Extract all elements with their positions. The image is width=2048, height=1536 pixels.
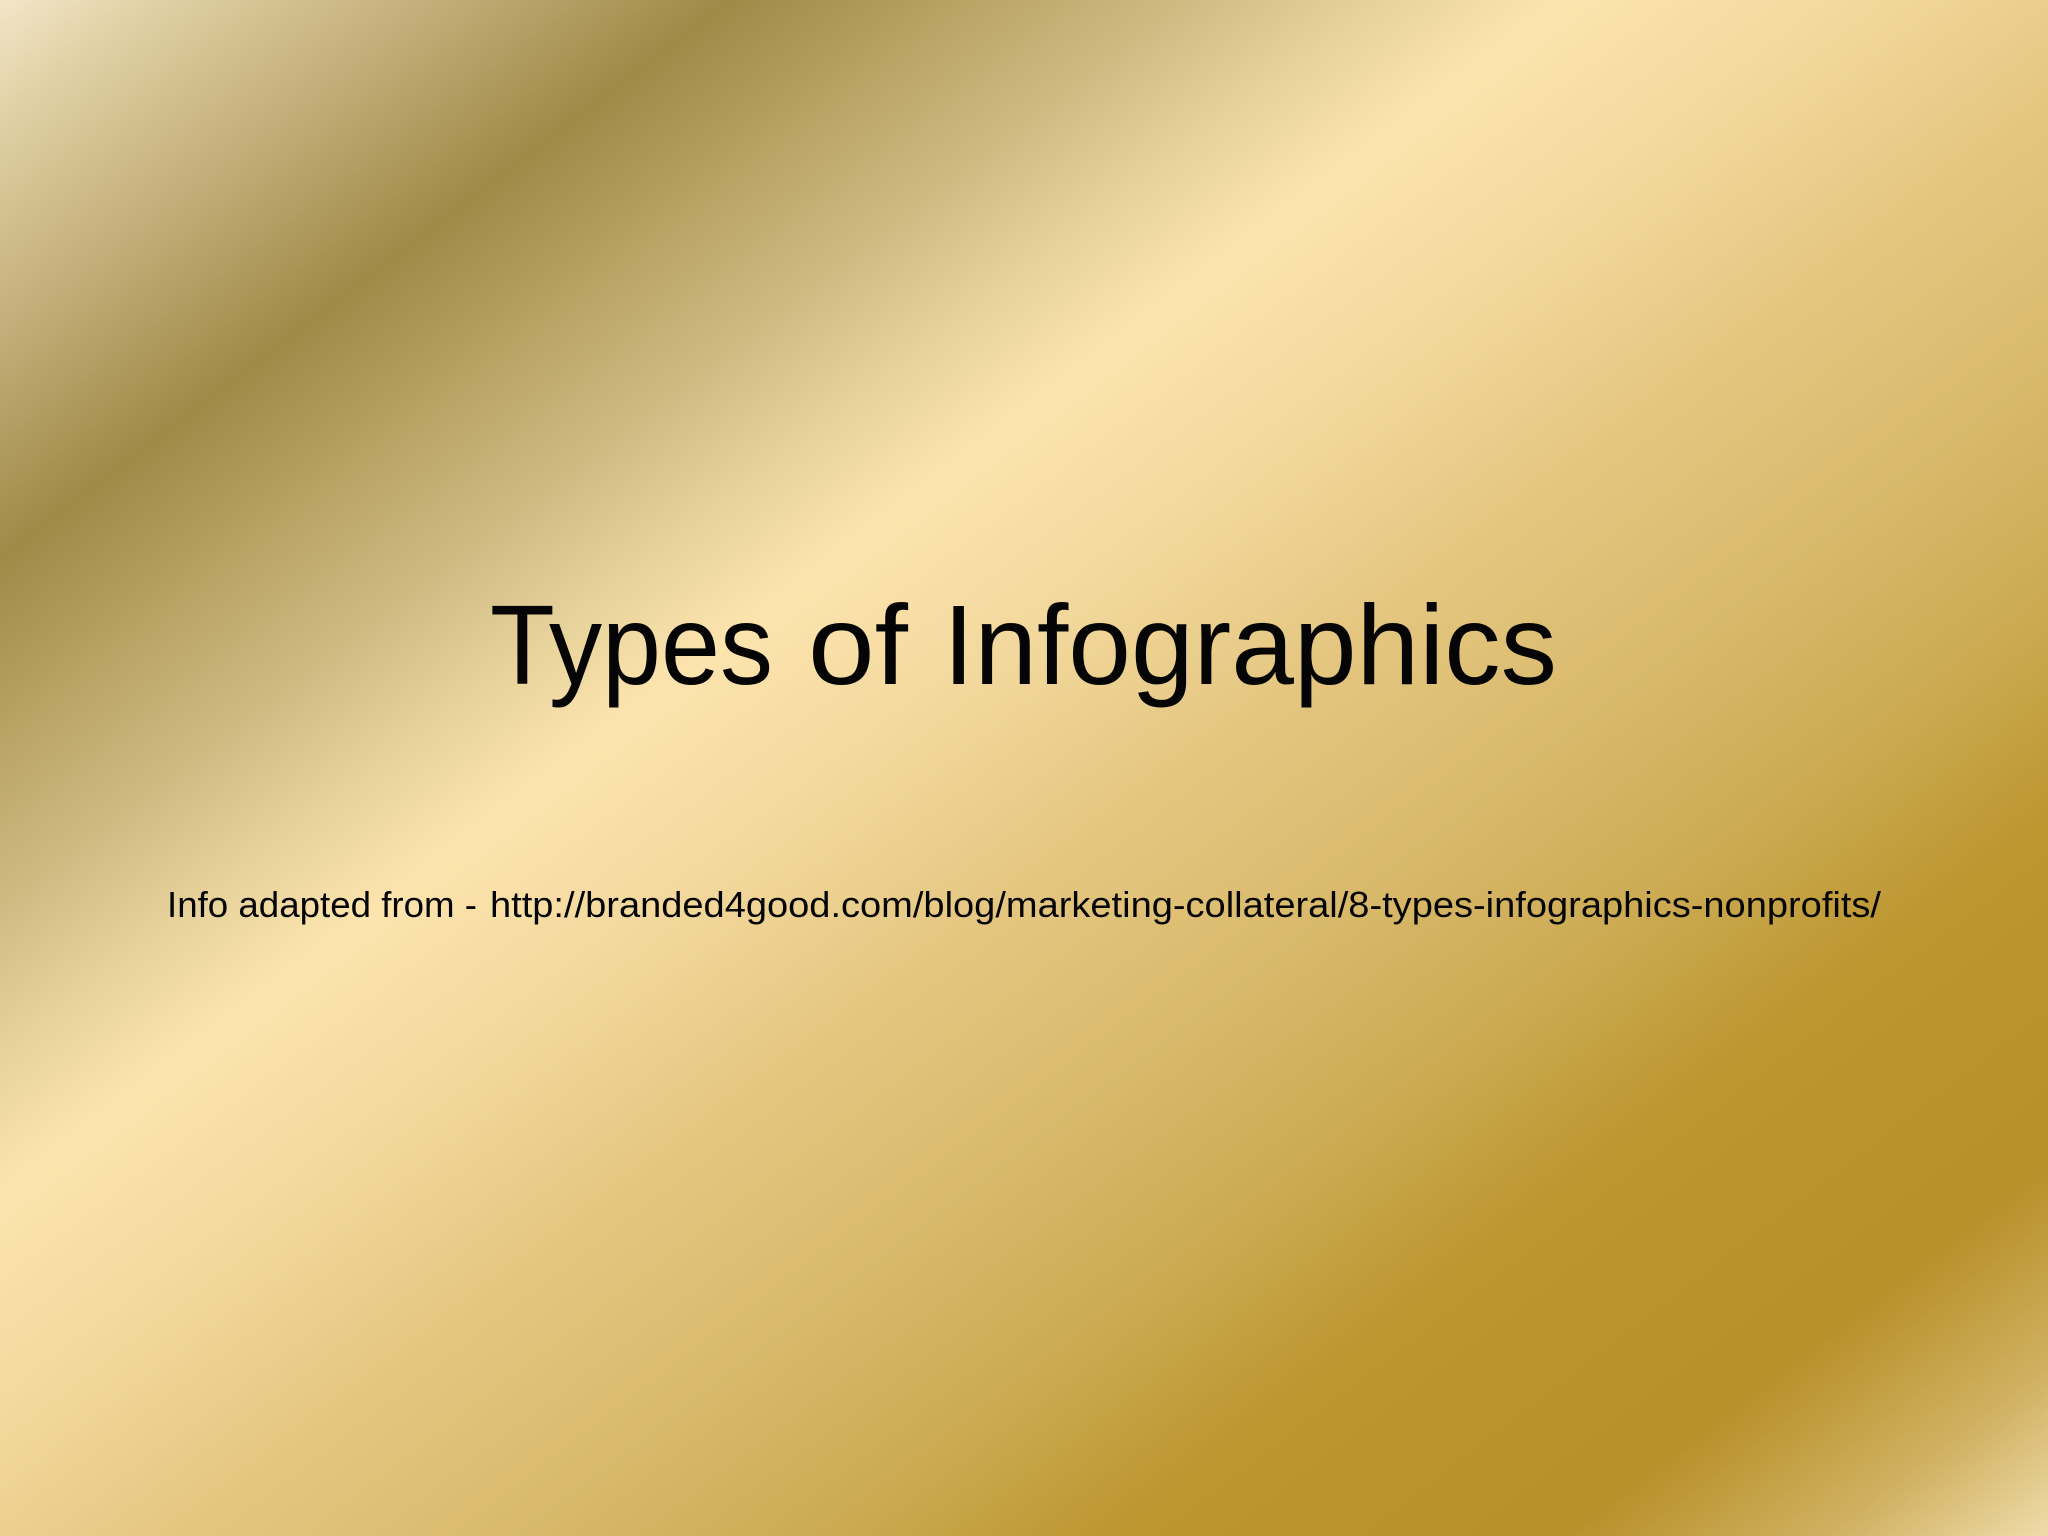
title: of [808,582,909,708]
title [490,582,1557,708]
title: Infographics [943,582,1557,708]
title: Types [490,582,773,708]
source line: http://branded4good.com/blog/marketing-collateral/8-types-infographics-nonprofits/ [490,884,1881,925]
source line: Info adapted from - [167,884,477,925]
